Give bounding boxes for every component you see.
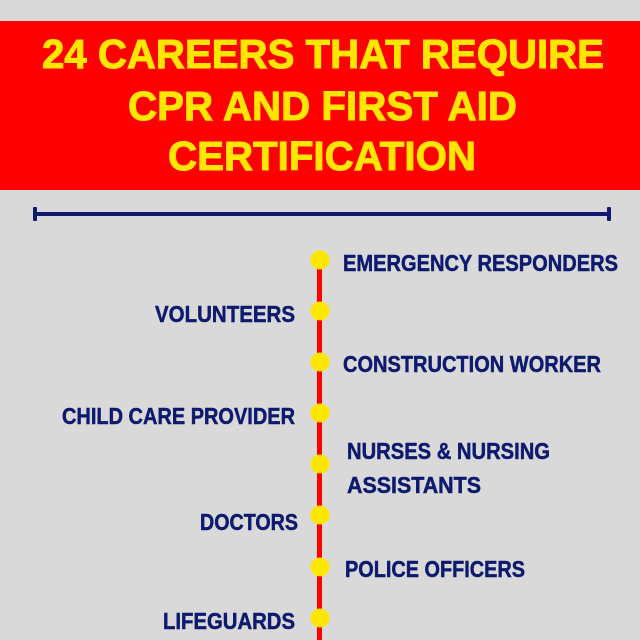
career labels: CHILD CARE PROVIDER xyxy=(62,403,295,429)
career labels: LIFEGUARDS xyxy=(163,608,295,634)
career labels: NURSES & NURSING xyxy=(347,438,550,464)
title: CPR AND FIRST AID xyxy=(128,83,517,129)
title: 24 CAREERS THAT REQUIRE xyxy=(42,31,604,77)
navy divider line xyxy=(33,207,611,221)
title: CERTIFICATION xyxy=(168,133,476,179)
career labels xyxy=(62,250,618,634)
career labels: CONSTRUCTION WORKER xyxy=(343,351,601,377)
title banner xyxy=(0,21,640,190)
career labels: VOLUNTEERS xyxy=(155,301,295,327)
career labels: DOCTORS xyxy=(200,509,298,535)
title xyxy=(42,31,604,179)
career labels: ASSISTANTS xyxy=(347,472,481,498)
timeline xyxy=(310,250,330,640)
career labels: POLICE OFFICERS xyxy=(345,556,525,582)
